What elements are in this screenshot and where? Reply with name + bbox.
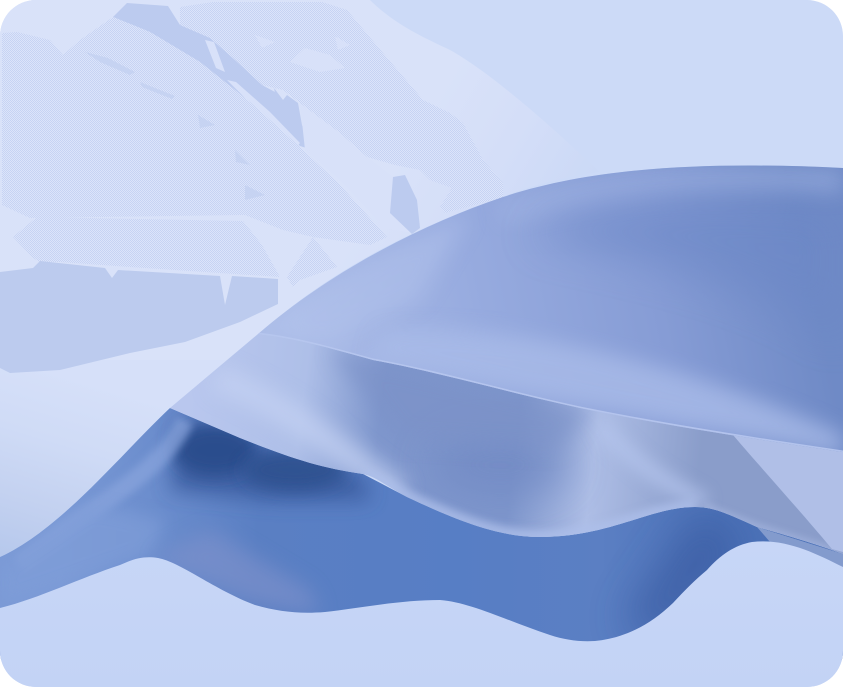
upper shadow <box>564 201 736 266</box>
pale cloth sheet <box>0 0 528 557</box>
lower hut roof <box>13 217 280 277</box>
bottom foreground wave <box>0 541 843 687</box>
small peak <box>287 237 337 287</box>
dark shadow center <box>243 450 347 490</box>
lower highlight <box>416 334 843 450</box>
lower fold tint <box>174 533 316 612</box>
light sheen <box>89 416 195 510</box>
main left slope <box>2 17 387 245</box>
light fold left <box>215 378 400 495</box>
dark mountain base <box>0 261 278 373</box>
left pale <box>374 232 448 303</box>
top cloth layer <box>250 160 843 460</box>
middle cloth layer <box>160 330 843 560</box>
ridge flecks <box>85 52 265 200</box>
right rim <box>705 507 843 554</box>
upper rim <box>500 179 843 215</box>
lower rim <box>258 334 843 452</box>
pale gully <box>302 126 313 150</box>
dark blob near cloth <box>390 175 420 234</box>
dark gully <box>274 88 304 140</box>
mountain illustration <box>0 2 503 373</box>
crevice highlights <box>205 40 300 148</box>
blue cloth layer <box>0 400 843 670</box>
light sheen right <box>620 444 709 508</box>
dark shadow across top <box>170 415 370 500</box>
right grey strip <box>757 527 843 570</box>
dark upper band <box>339 354 590 444</box>
snow patches on ridge <box>255 35 350 72</box>
right shadow <box>628 520 734 629</box>
bottom rim <box>394 486 695 537</box>
left tail tint <box>98 518 158 558</box>
right pale panel <box>733 435 843 552</box>
upper right ridge texture <box>180 2 503 213</box>
dark centre <box>462 447 578 498</box>
dark band along ridge <box>113 3 313 150</box>
dark shadow left <box>173 424 257 476</box>
